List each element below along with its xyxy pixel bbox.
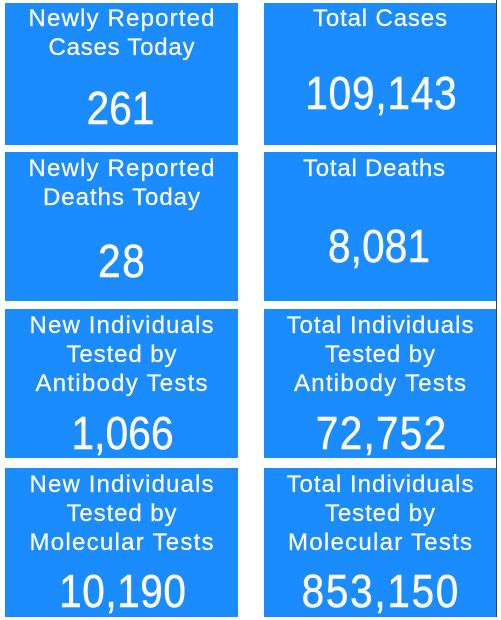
panel: new individuals tested by antibody tests (5, 309, 238, 460)
heading: total individuals tested by molecular tests (286, 471, 474, 556)
heading: newly reported cases today (28, 5, 214, 61)
number: 109,143: 109,143 (305, 69, 457, 120)
heading: total cases: Total Cases (313, 5, 447, 32)
heading: total deaths: Total Deaths (303, 155, 445, 182)
heading: total individuals tested by antibody tests (286, 312, 474, 397)
number: 28: 28 (98, 237, 145, 288)
heading: total individuals tested by antibody tests: Antibody Tests (294, 370, 466, 397)
panel: newly reported cases today (5, 3, 238, 145)
heading: newly reported deaths today: Deaths Today (43, 184, 200, 211)
number: 72,752: 72,752 (316, 409, 446, 460)
heading: new individuals tested by antibody tests: Antibody Tests (36, 370, 208, 397)
number: 8,081: 8,081 (328, 222, 430, 273)
heading: new individuals tested by antibody tests: New Individuals (30, 312, 214, 339)
panel: total deaths (264, 152, 496, 301)
heading: total individuals tested by antibody tests: Tested by (325, 341, 435, 368)
panel: total individuals tested by antibody tests (264, 309, 496, 460)
heading: new individuals tested by antibody tests (30, 312, 214, 397)
number: 261: 261 (87, 84, 154, 135)
number: 10,190: 10,190 (59, 567, 186, 618)
heading: new individuals tested by molecular tests (30, 471, 214, 556)
heading: total individuals tested by molecular tests: Tested by (325, 500, 435, 527)
heading: new individuals tested by antibody tests: Tested by (66, 341, 176, 368)
heading: total individuals tested by antibody tests: Total Individuals (286, 312, 474, 339)
number: 853,150: 853,150 (302, 567, 458, 618)
heading: total individuals tested by molecular tests: Total Individuals (286, 471, 474, 498)
heading: new individuals tested by molecular tests: Tested by (66, 500, 176, 527)
heading: newly reported deaths today (28, 155, 214, 211)
heading: new individuals tested by molecular tests: New Individuals (30, 471, 214, 498)
heading: newly reported deaths today: Newly Reported (28, 155, 214, 182)
panel: new individuals tested by molecular tests (5, 468, 238, 618)
panel: total cases (264, 3, 496, 145)
heading: newly reported cases today: Cases Today (48, 34, 194, 61)
heading: newly reported cases today: Newly Reported (28, 5, 214, 32)
heading: total individuals tested by molecular tests: Molecular Tests (288, 529, 472, 556)
panel: newly reported deaths today (5, 152, 238, 301)
heading: new individuals tested by molecular tests: Molecular Tests (30, 529, 214, 556)
number: 1,066: 1,066 (71, 409, 174, 460)
panel: total individuals tested by molecular tests (264, 468, 496, 618)
